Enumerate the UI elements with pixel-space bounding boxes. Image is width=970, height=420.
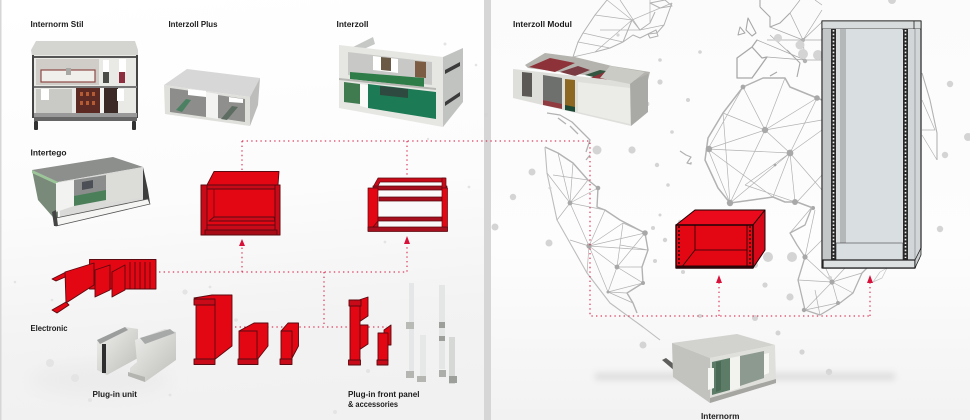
continent: Southern Africa <box>790 207 887 315</box>
continent: Central America <box>547 113 590 160</box>
heading: Electronic: Electronic <box>30 323 68 333</box>
red front panel: large <box>348 297 368 365</box>
continent: Europe <box>737 0 822 78</box>
arrow: to red box <box>716 275 722 283</box>
red electronic card assembly <box>52 260 156 313</box>
panel: right background <box>491 0 970 420</box>
heading: Interzoll Plus: Interzoll Plus <box>168 19 218 29</box>
ground shadow under Internorm <box>595 373 895 380</box>
vertical divider band <box>484 0 491 420</box>
red plug-in unit: medium <box>238 323 268 364</box>
grey rack cabinet <box>822 21 921 268</box>
left panel scatter dots <box>14 42 477 414</box>
heading: Intertego: Intertego <box>30 148 66 158</box>
left panel smudge <box>30 362 170 398</box>
heading: Interzoll: Interzoll <box>336 19 368 29</box>
red front panel: small <box>377 325 391 365</box>
product photo: accessories rails <box>406 283 457 384</box>
red plug-in unit: large <box>194 295 232 364</box>
product photo: plug-in unit <box>97 327 176 382</box>
heading: Plug-in front panel and accessories: Plug-in front panel <box>348 389 420 399</box>
arrow: to rack <box>867 275 873 283</box>
arrow: to red subrack <box>239 239 245 246</box>
continent: South America <box>545 147 660 340</box>
heading: Plug-in unit: Plug-in unit <box>92 389 137 399</box>
left edge strip <box>0 0 2 420</box>
globe scatter dots <box>484 0 970 375</box>
product photo: Interzoll <box>339 37 463 127</box>
red subrack <box>201 172 280 235</box>
continent: small islands <box>680 151 691 164</box>
product photo: Internorm Stil <box>31 41 138 130</box>
product photo: Intertego <box>32 157 150 226</box>
red frame <box>368 178 448 232</box>
panel: left background <box>0 0 484 420</box>
red plug-in unit: small <box>280 323 298 364</box>
heading: Plug-in front panel and accessories: & accessories <box>348 399 398 409</box>
continent: Africa <box>705 78 822 210</box>
red case <box>676 210 765 268</box>
continent: North America <box>573 0 672 57</box>
heading: Interzoll Modul: Interzoll Modul <box>513 19 572 29</box>
heading: Internorm Stil: Internorm Stil <box>30 19 84 29</box>
product photo: Internorm <box>662 334 776 403</box>
connector lines: dotted red <box>159 141 870 327</box>
arrow: to red frame <box>404 236 410 244</box>
continent: Asia edge <box>922 73 937 160</box>
product photo: Interzoll Plus <box>164 69 260 126</box>
product photo: Interzoll Modul <box>513 53 650 126</box>
